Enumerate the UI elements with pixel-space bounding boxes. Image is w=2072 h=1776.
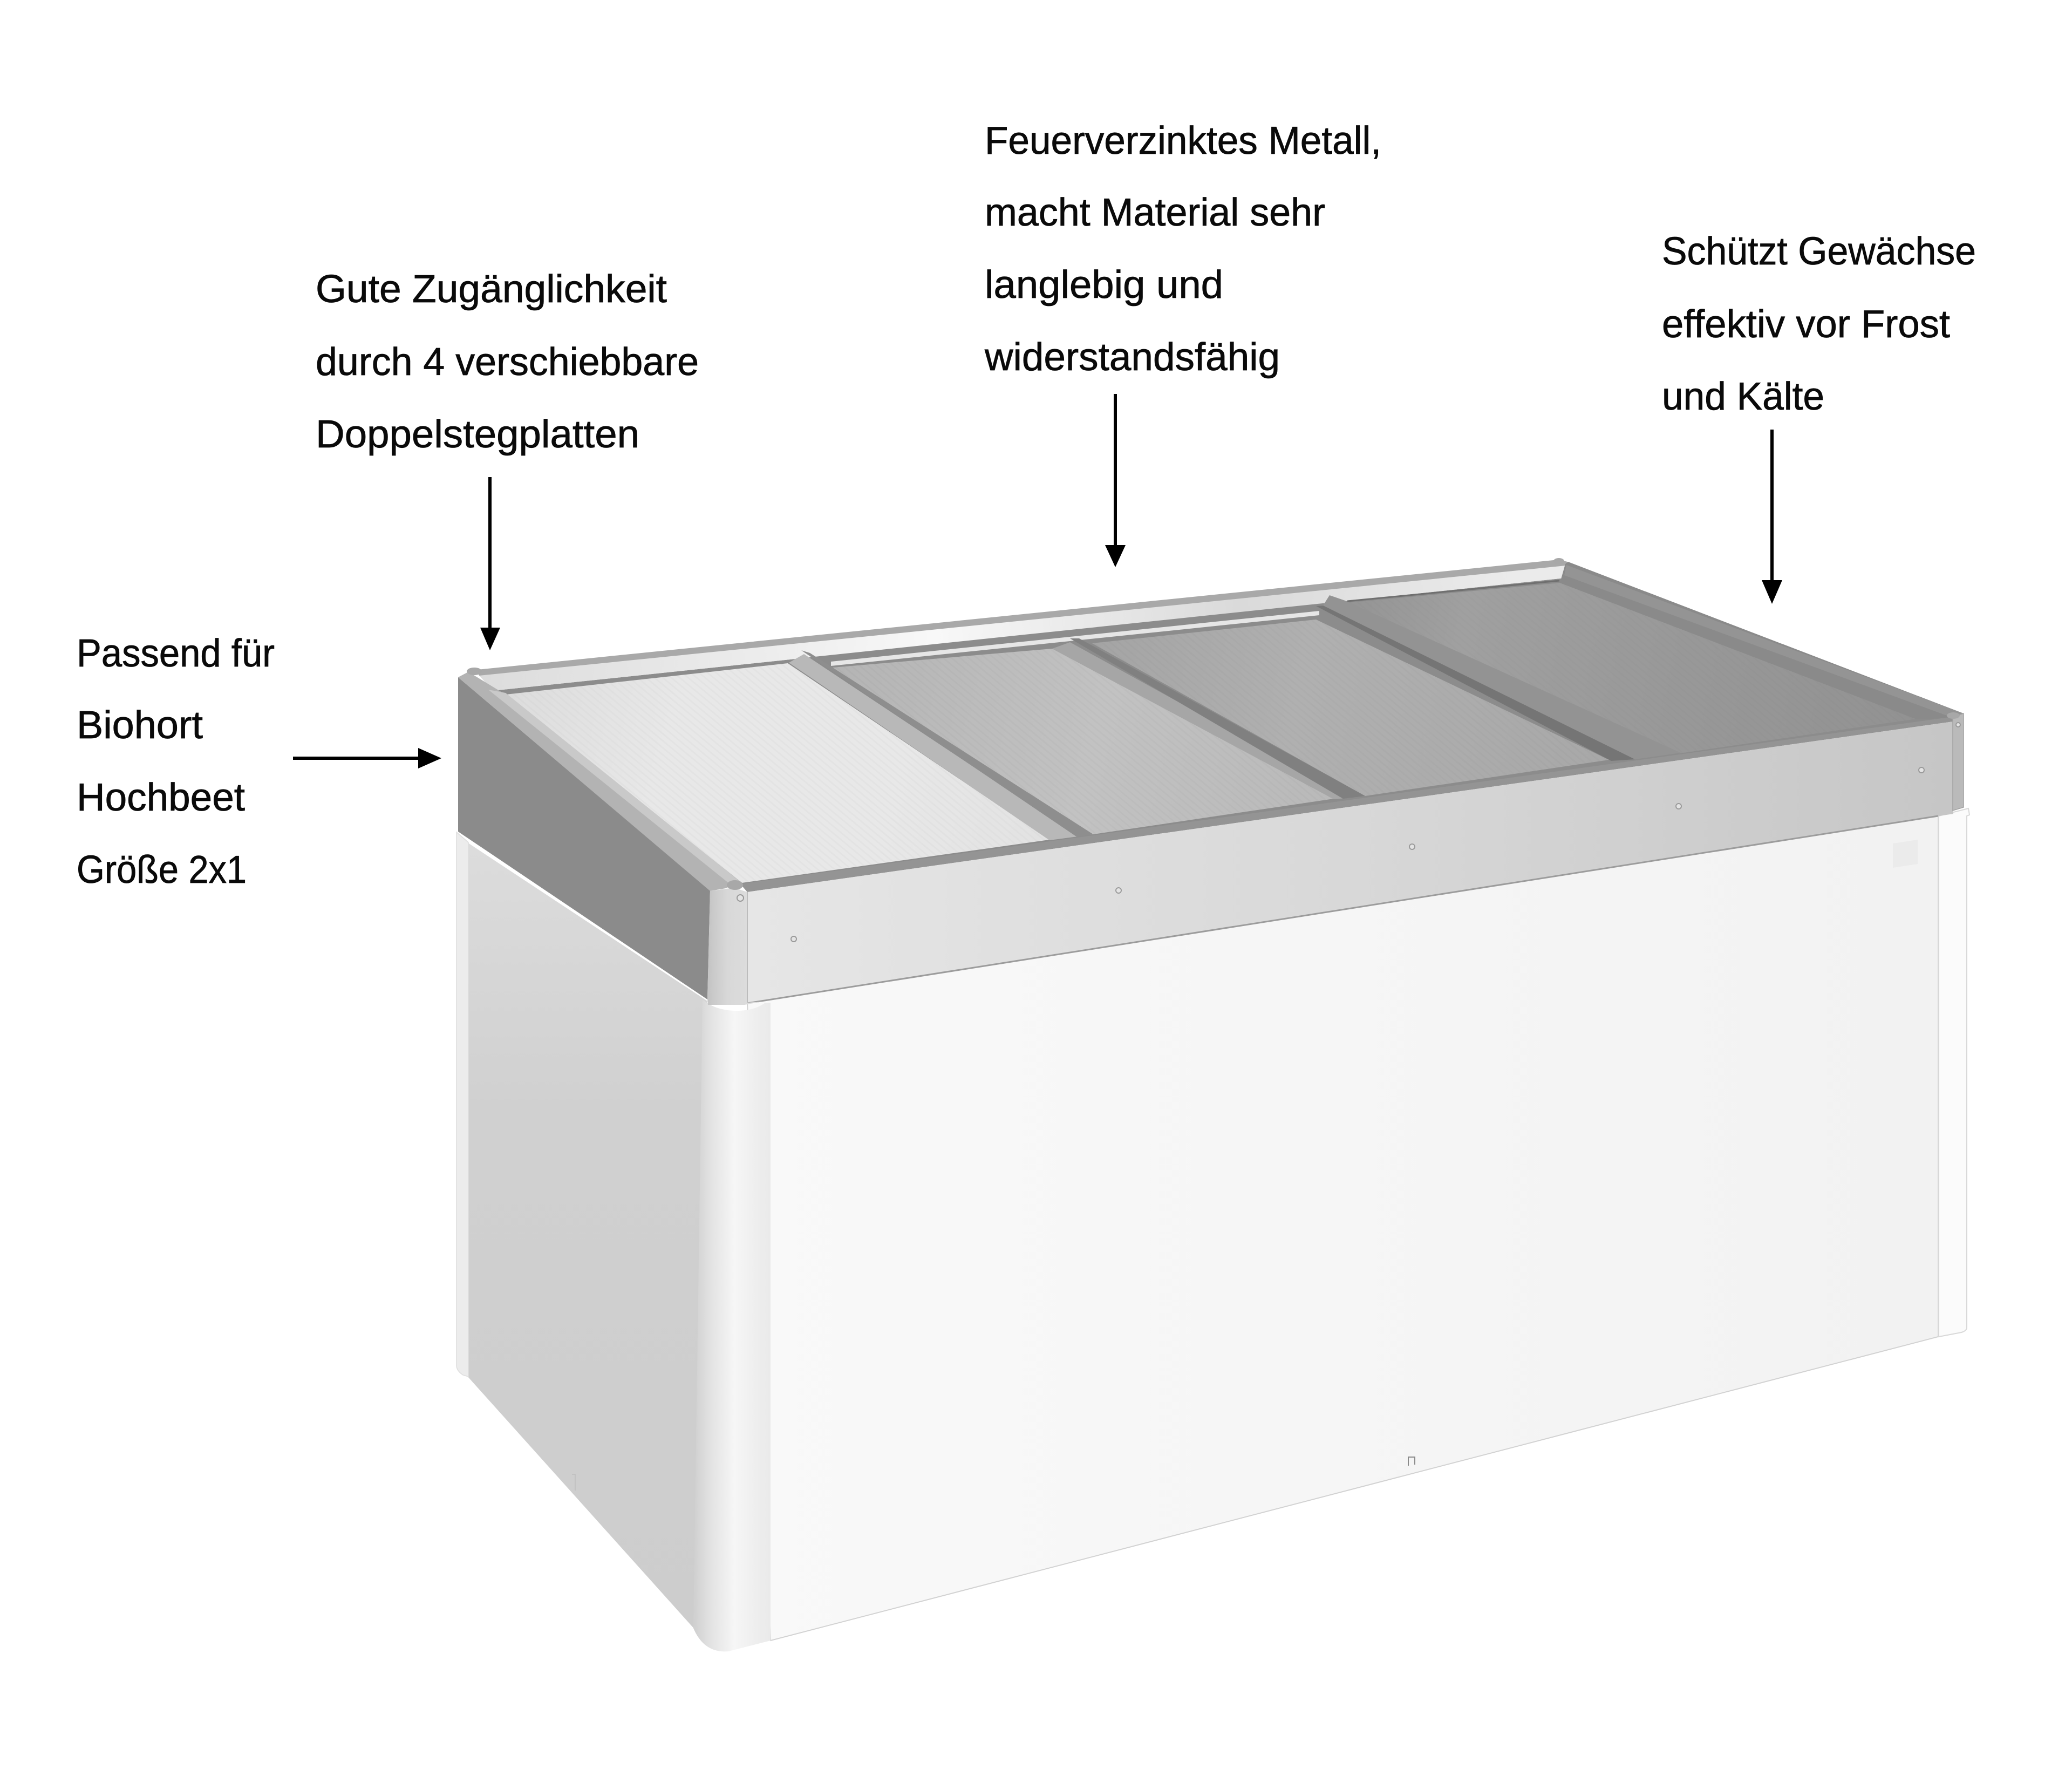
left side panel	[467, 842, 707, 1631]
callout: Feuerverzinktes Metall: widerstandsfähig	[984, 336, 1280, 379]
callout: Passend für Biohort Hochbeet: Passend für	[77, 632, 275, 675]
polycarbonate panel 4	[1347, 583, 1917, 753]
polycarbonate panel 1	[506, 663, 1049, 883]
planter box body	[456, 808, 1969, 1651]
callout: Passend für Biohort Hochbeet	[77, 632, 275, 892]
back rail edge	[477, 560, 1567, 676]
callout: Feuerverzinktes Metall	[984, 119, 1381, 379]
shadow under back strip	[1347, 581, 1559, 601]
callout: Passend für Biohort Hochbeet: Hochbeet	[77, 776, 245, 819]
callout: Schutz vor Frost: effektiv vor Frost	[1662, 303, 1950, 346]
arrow: to side wall	[293, 748, 441, 768]
callout: Feuerverzinktes Metall: langlebig und	[985, 263, 1223, 307]
callout: Zugänglichkeit: Doppelstegplatten	[316, 413, 639, 456]
arrow: to cover	[1762, 430, 1782, 604]
cold frame attachment	[458, 558, 1964, 1005]
callout: Schutz vor Frost: Schützt Gewächse	[1662, 230, 1976, 273]
corner profile seam	[747, 892, 748, 1003]
side foot clip	[572, 1474, 575, 1491]
divider rail 2	[1052, 638, 1365, 799]
callout: Passend für Biohort Hochbeet: Größe 2x1	[77, 848, 247, 892]
callout: Zugänglichkeit: Gute Zugänglichkeit	[316, 268, 667, 311]
bottom clip	[1408, 1457, 1415, 1466]
right silver corner profile	[1953, 713, 1964, 811]
front top edge	[740, 717, 1953, 892]
arrow: to metal frame	[1105, 394, 1126, 567]
back metal strip	[478, 563, 1565, 691]
roof base under panels	[493, 578, 1953, 885]
front silver band	[747, 722, 1953, 1003]
callout: Zugänglichkeit: durch 4 verschiebbare	[316, 341, 699, 384]
grey side wall	[458, 677, 710, 999]
divider rail 3	[1316, 595, 1681, 761]
corner knobs	[467, 558, 1960, 890]
callout: Zugänglichkeit	[316, 268, 699, 456]
polycarbonate panel 2	[833, 649, 1334, 835]
callout: Feuerverzinktes Metall: macht Material sehr	[985, 191, 1325, 234]
manufacturer label patch	[1893, 840, 1918, 868]
arrow: to panels	[480, 477, 500, 650]
front right corner post	[1939, 808, 1969, 1337]
silver corner profile	[707, 888, 762, 1005]
left side rail	[458, 672, 740, 891]
inner back rail behind panels	[809, 602, 1333, 673]
callout: Passend für Biohort Hochbeet: Biohort	[77, 704, 203, 747]
screws	[737, 723, 1960, 942]
polycarbonate panel 3	[1092, 620, 1609, 796]
callout: Schutz vor Frost: und Kälte	[1662, 375, 1824, 418]
callout: Feuerverzinktes Metall: Feuerverzinktes Metall,	[985, 119, 1381, 162]
band bottom shadow line	[747, 816, 1938, 1003]
right side rail	[1560, 562, 1964, 719]
front left rounded corner post	[693, 999, 771, 1651]
callout: Schutz vor Frost	[1662, 230, 1976, 418]
left corner post	[456, 832, 468, 1377]
front panel	[747, 815, 1938, 1641]
divider rail 1	[789, 650, 1093, 840]
